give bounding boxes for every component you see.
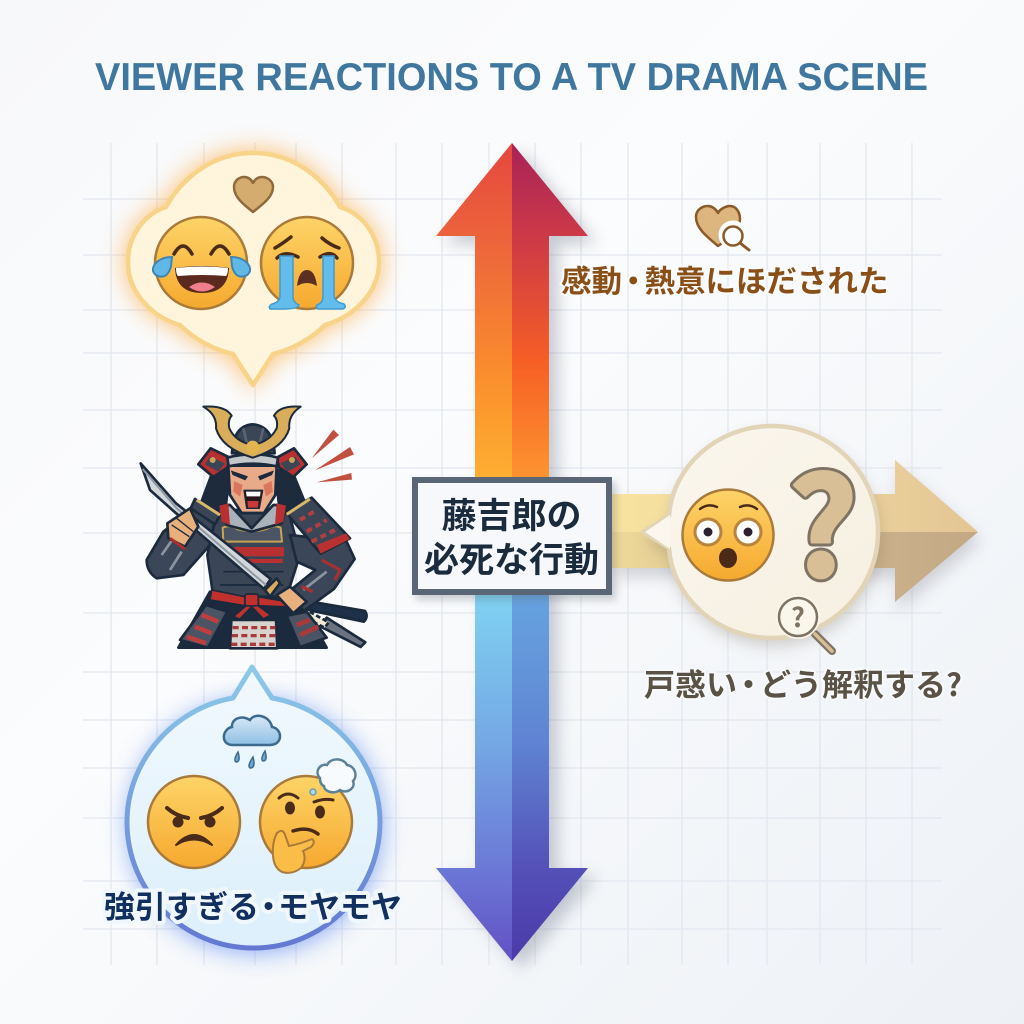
helmet [198,424,307,477]
panel: confusion bubble [643,419,880,651]
arrow up: positive reactions [436,143,588,480]
icon: magnifier with question [776,595,832,651]
label: confusion text: 戸惑い・どう解釈する? [644,660,962,705]
lower body silhouette [178,592,327,648]
chest plate and stripes [220,526,284,585]
scabbard [300,601,367,647]
belt [210,590,287,619]
emoji: laughing with tears [153,217,250,309]
panel: negative reaction bubble [127,667,382,953]
icon: heart with magnifier [696,206,749,250]
emoji: surprised [682,490,774,580]
arrow down: negative reactions [436,590,588,961]
center box: Tokichiro's desperate action: 必死な行動 [424,541,599,580]
center box: Tokichiro's desperate action: 藤吉郎の [441,497,582,536]
emoji: angry [148,776,240,868]
collar [221,505,287,532]
hair and back [198,470,307,513]
vertical axis arrow [436,143,597,969]
icon: question mark: ? [788,419,858,615]
label: negative reaction text: 強引すぎる・モヤモヤ [104,890,402,925]
label: positive reaction text: 感動・熱意にほだされた [561,265,888,299]
center box: Tokichiro's desperate action [415,480,616,600]
emphasis lines [312,430,354,482]
background grid [83,143,942,965]
left arm [147,507,225,578]
icon: question mark: ? [788,419,858,615]
icon: magnifier with question: ? [791,596,805,635]
torso [207,510,300,597]
hands [167,508,313,613]
panel: positive reaction bubble [128,153,379,385]
armor skirt [180,605,327,648]
emoji: crying [261,217,353,309]
icon: heart [234,177,273,212]
helmet crest [203,406,301,458]
right arm [287,535,355,611]
samurai illustration [141,406,367,648]
emoji: thinking [260,759,355,873]
icon: rain cloud [224,716,280,768]
sword blade [141,463,271,589]
horizontal arrow [612,460,981,611]
face [228,466,277,513]
shoulder armor [191,498,350,554]
title: VIEWER REACTIONS TO A TV DRAMA SCENE [95,56,928,99]
